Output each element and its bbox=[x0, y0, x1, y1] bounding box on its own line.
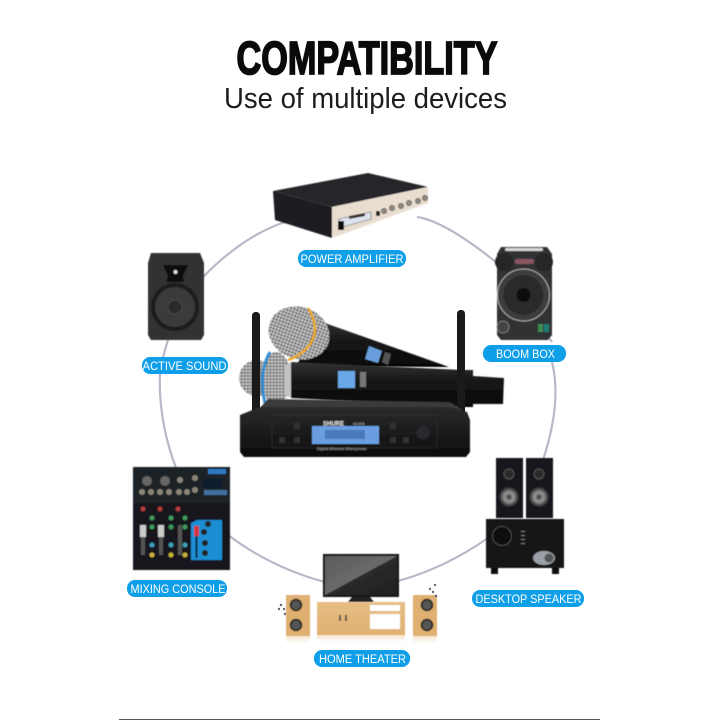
left speaker bbox=[286, 595, 310, 643]
receiver body: SHURE bbox=[323, 422, 344, 428]
device: boom box bbox=[495, 247, 553, 340]
receiver body bbox=[240, 399, 470, 457]
device: mixing console bbox=[133, 467, 230, 570]
label: desktop speaker: DESKTOP SPEAKER bbox=[476, 592, 582, 606]
sound notes bbox=[278, 584, 437, 615]
device: home theater bbox=[278, 554, 437, 643]
label: active sound: ACTIVE SOUND bbox=[142, 359, 227, 373]
cabinet bbox=[317, 602, 405, 642]
subtitle: Use of multiple devices bbox=[224, 83, 507, 115]
device: desktop speaker bbox=[486, 458, 564, 574]
antenna: right bbox=[457, 310, 465, 440]
right speaker bbox=[413, 595, 437, 643]
device: power amplifier bbox=[273, 173, 428, 238]
label: boom box: BOOM BOX bbox=[496, 347, 555, 361]
label: power amplifier: POWER AMPLIFIER bbox=[300, 252, 404, 266]
receiver body: Digital Wireless Microphone bbox=[317, 446, 367, 451]
microphone: rear, yellow ring bbox=[261, 298, 449, 368]
receiver body: GLXD4 bbox=[353, 422, 365, 426]
connecting circle bbox=[160, 217, 555, 582]
microphone: front, blue ring bbox=[239, 352, 504, 407]
antenna: left bbox=[252, 312, 260, 442]
television bbox=[323, 554, 399, 602]
title: COMPATIBILITY bbox=[236, 32, 498, 84]
label: home theater: HOME THEATER bbox=[319, 652, 406, 666]
label: mixing console: MIXING CONSOLE bbox=[130, 582, 226, 596]
device: active sound bbox=[148, 253, 204, 340]
label: boom box bbox=[483, 345, 566, 362]
device: wireless microphone set bbox=[239, 298, 504, 457]
